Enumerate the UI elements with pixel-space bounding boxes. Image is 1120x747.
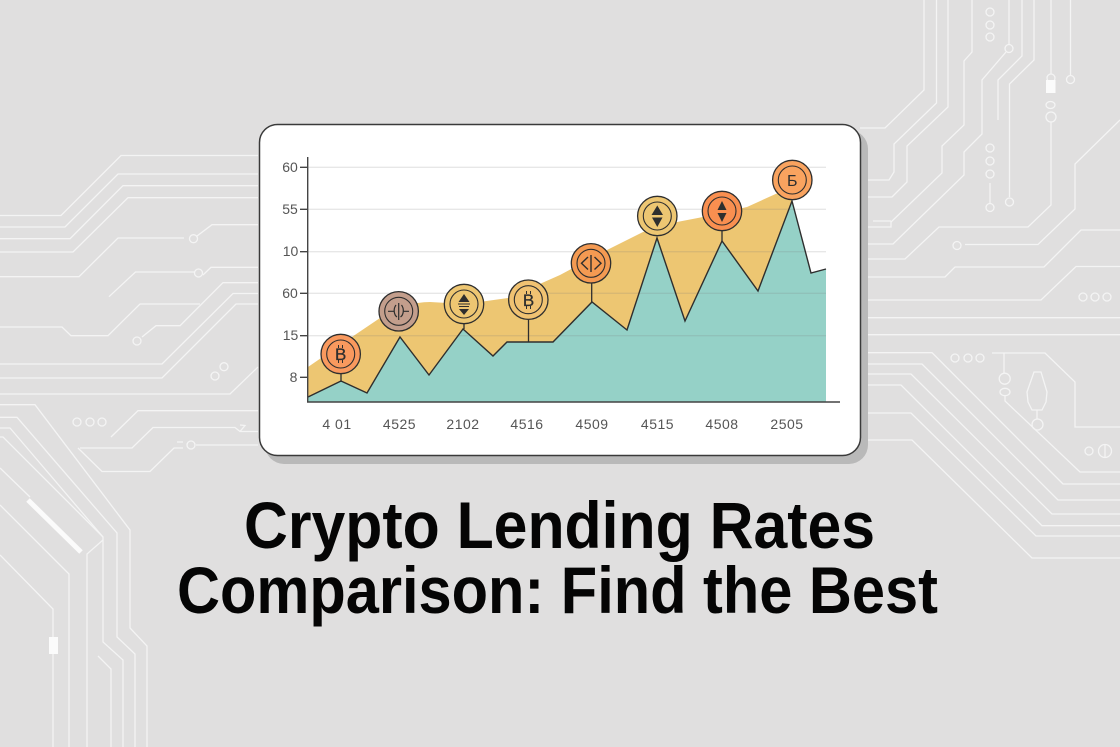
- rate line: [308, 201, 826, 397]
- x axis labels: 4516: [510, 416, 544, 432]
- x axis labels: 4509: [575, 416, 609, 432]
- yellow area: [308, 192, 792, 402]
- x axis labels: 2505: [770, 416, 804, 432]
- circuit traces: left side: [0, 156, 258, 747]
- x axis labels: 4515: [641, 416, 674, 432]
- icon: coin 1 bitcoin: [321, 334, 360, 374]
- x axis labels: 4508: [705, 416, 739, 432]
- y axis labels: 15: [283, 327, 298, 343]
- x axis labels: [322, 416, 804, 432]
- teal area: [308, 201, 826, 402]
- axes: [300, 157, 840, 402]
- icon: coin 4 bitcoin: [509, 280, 548, 319]
- circuit traces: right side: [860, 0, 1120, 558]
- title: [177, 488, 938, 627]
- grid lines: [308, 167, 826, 336]
- panel: chart card: [260, 124, 868, 464]
- x axis labels: 4 01: [322, 416, 352, 432]
- icon: coin 8: [773, 160, 812, 200]
- icon: coin 4 bitcoin: B: [523, 291, 534, 310]
- title: Comparison: Find the Best: [177, 553, 938, 627]
- icon: coin 5 code: [571, 244, 611, 283]
- icon: coin 3: [444, 284, 484, 324]
- y axis labels: 10: [283, 243, 298, 259]
- x axis labels: 2102: [446, 416, 480, 432]
- icon: coin 1 bitcoin: B: [335, 345, 346, 364]
- icon: coin 2: [379, 292, 418, 331]
- icon: coin 8: Б: [787, 173, 798, 190]
- y axis labels: 8: [290, 369, 298, 385]
- coin stems: [341, 231, 722, 381]
- title: Crypto Lending Rates: [244, 488, 875, 562]
- area chart: [300, 157, 840, 402]
- y axis labels: 60: [282, 159, 298, 175]
- y axis labels: 55: [282, 201, 298, 217]
- y axis labels: [282, 159, 298, 385]
- icon: coin 6 ethereum: [638, 196, 677, 236]
- icon: coin 7 ethereum: [702, 191, 742, 231]
- y axis labels: 60: [282, 285, 298, 301]
- x axis labels: 4525: [383, 416, 416, 432]
